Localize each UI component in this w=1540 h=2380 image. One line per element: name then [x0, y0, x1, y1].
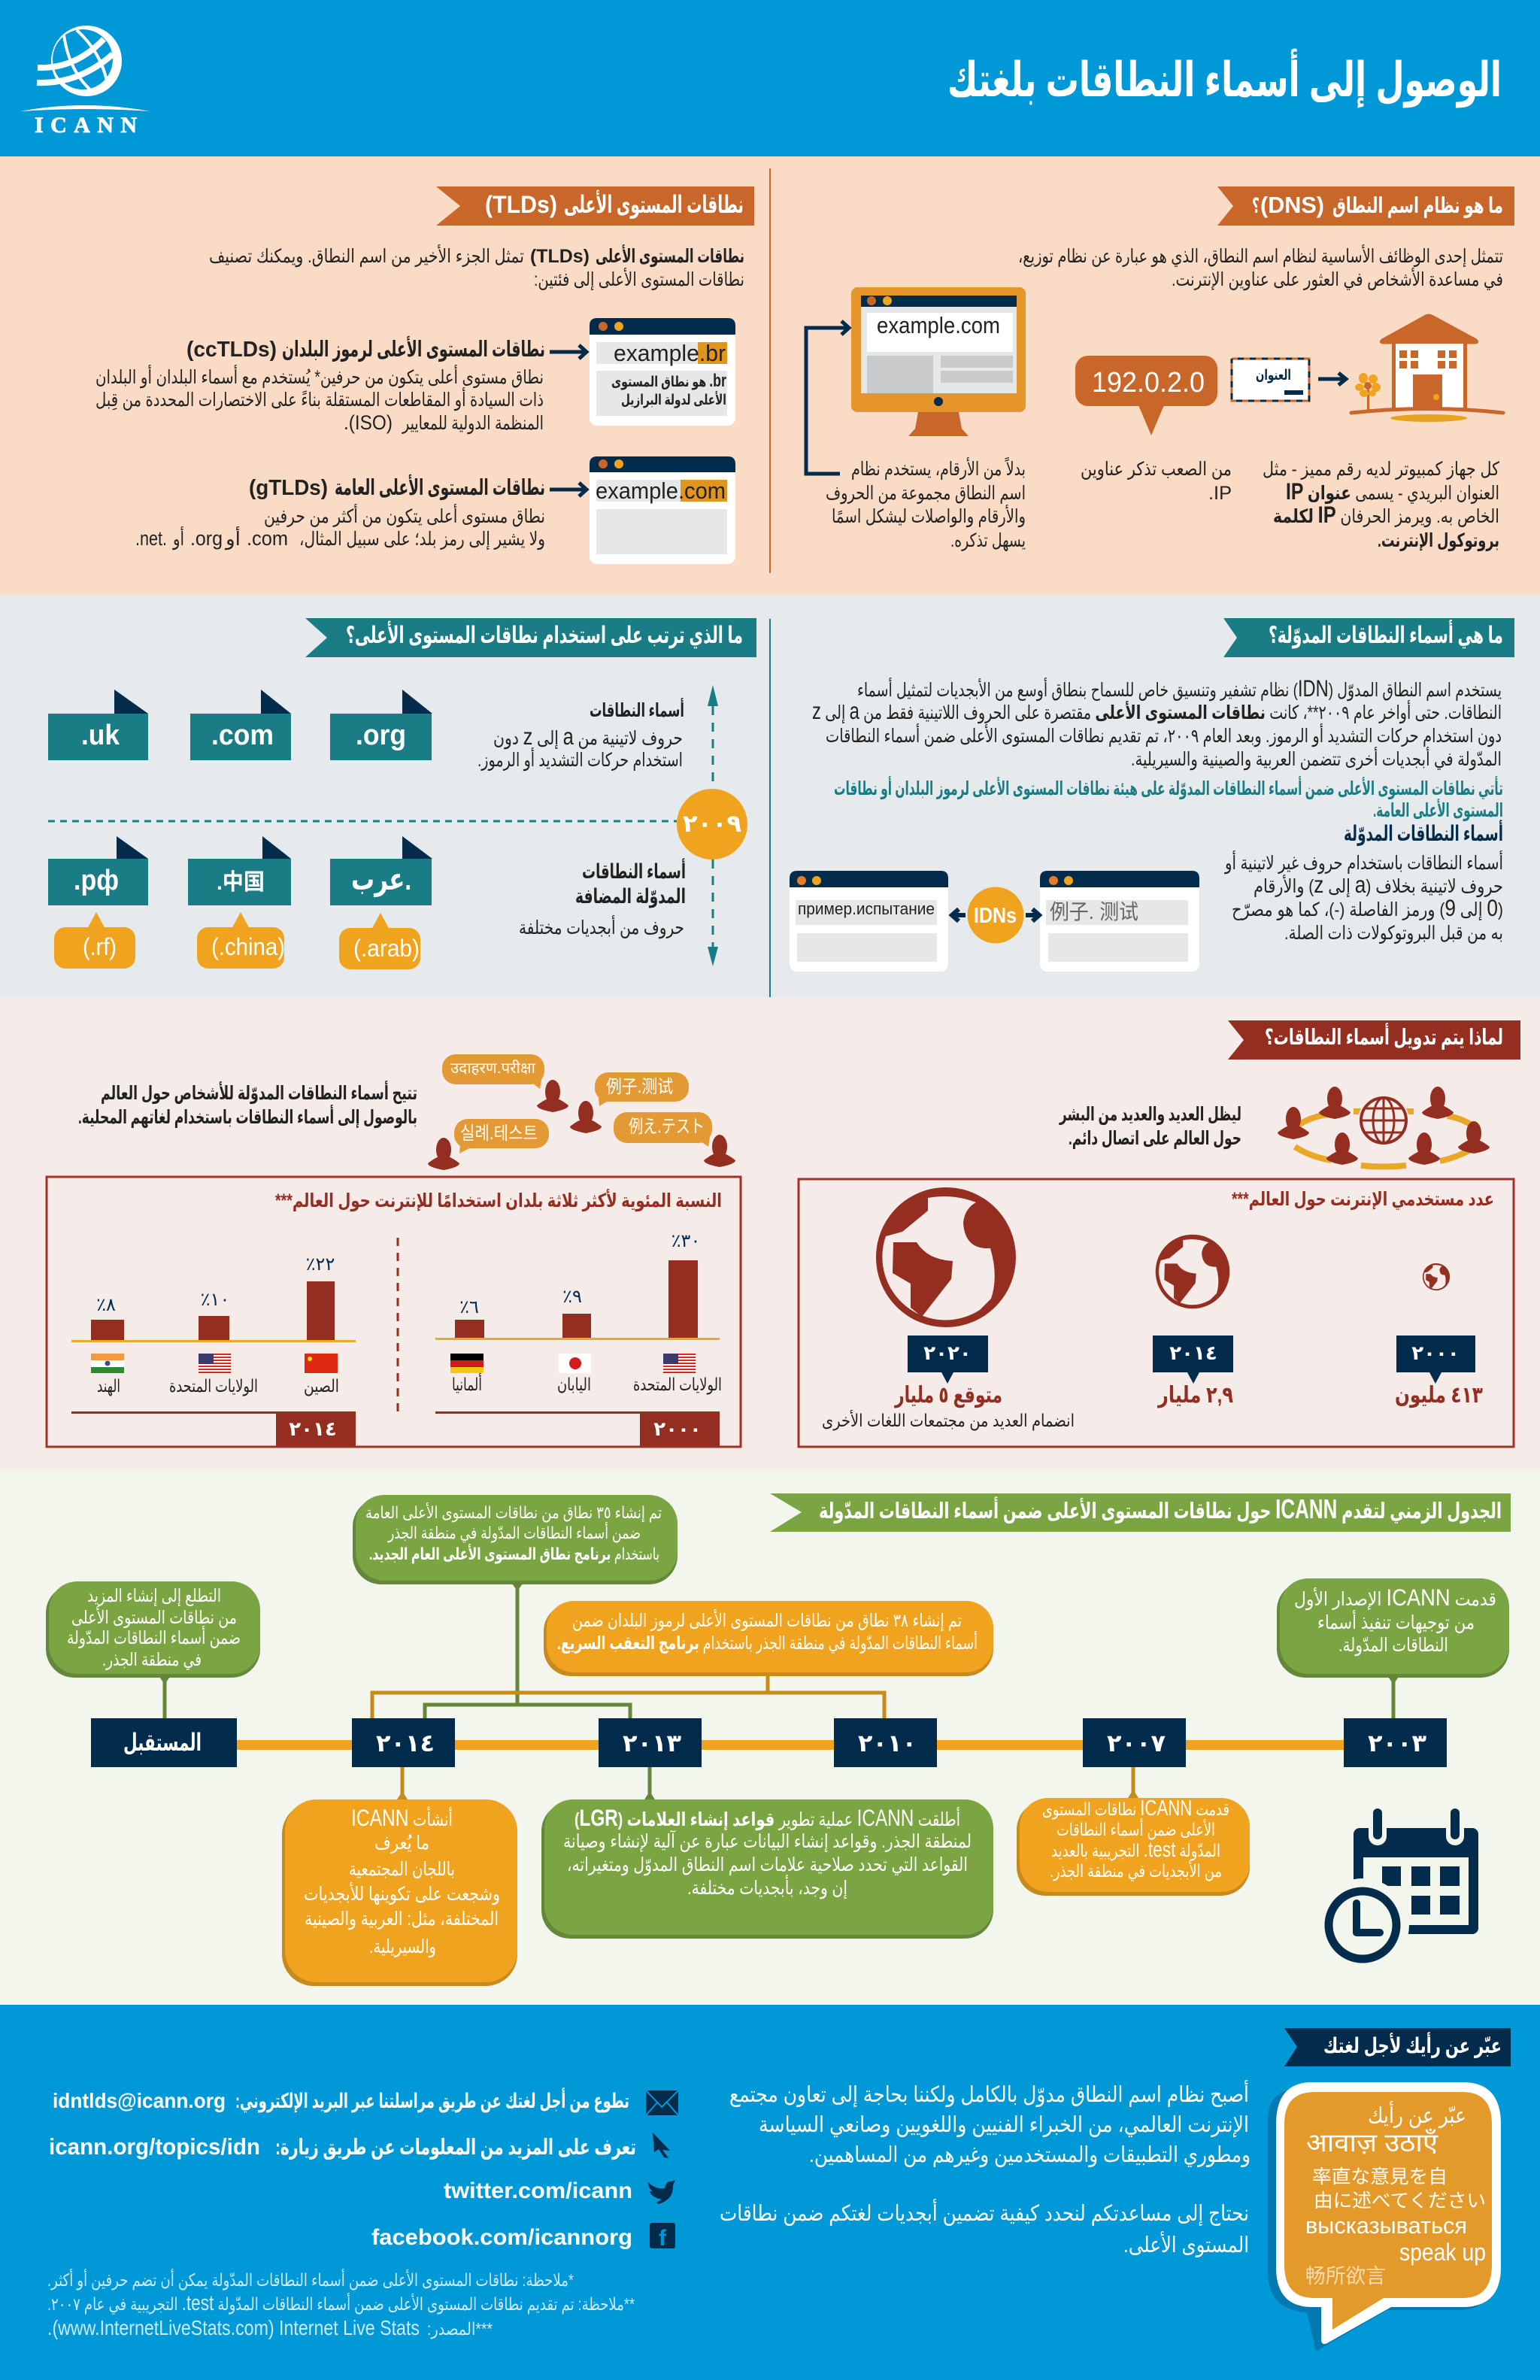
gTLDs text: أو: [224, 526, 241, 550]
globe: 2014: [1156, 1235, 1229, 1308]
ccTLDs text: المنظمة الدولية للمعايير: [401, 413, 544, 435]
text: people connected: ليظل العديد والعديد من البشر: [1059, 1104, 1241, 1126]
label: domain names: استخدام حركات التشديد أو الرموز.: [477, 747, 683, 772]
label: domain names: حروف لاتينية من a إلى z دون: [493, 723, 683, 750]
caption: IP address: العنوان البريدي - يسمى عنوان IP: [1286, 478, 1499, 505]
panel: TLDs: [95, 186, 754, 564]
contact: email: تطوع من أجل لغتك عن طريق مراسلتنا عبر البريد الإلكتروني:: [235, 2087, 629, 2113]
timeline year: 2007: [1083, 1718, 1186, 1767]
callout: .arab: (.arab): [353, 935, 420, 962]
callout: 2003: [1277, 1578, 1509, 1684]
arrow to house: [1318, 373, 1346, 385]
callout: 2014 community panels: باللجان المجتمعية: [349, 1859, 455, 1880]
icon: tag .uk: [48, 690, 148, 760]
text: people connected: حول العالم على اتصال دائم.: [1069, 1128, 1241, 1150]
callout: 2014 community panels: ما يُعرف: [374, 1833, 429, 1854]
browser card: example.br: ‎.br‏ هو نطاق المستوى: [611, 371, 726, 391]
year tag: 2000: [1396, 1336, 1475, 1384]
label: internationalized domain names: المدوّلة المضافة: [575, 885, 686, 908]
bar chart: 2000: الولايات المتحدة: [633, 1375, 722, 1395]
ccTLDs text: .(ISO): [344, 411, 393, 434]
callout: 2014 community panels: أنشأت ICANN: [351, 1805, 453, 1831]
icon: tag .uk: .uk: [81, 720, 120, 751]
bar chart: 2000: ٩٪: [562, 1287, 582, 1307]
icon: monitor: [851, 287, 1026, 436]
caption: domain names: بدلاً من الأرقام، يستخدم نظام: [851, 456, 1026, 480]
callout: .china: (.china): [211, 933, 285, 960]
callout: 2010 fast track: تم إنشاء ٣٨ نطاق من نطاقات المستوى الأعلى لرموز البلدان ضمن: [572, 1609, 962, 1632]
icon: envelope: العنوان: [1256, 368, 1291, 384]
icon: speak-up bubble: आवाज़ उठाएँ: [1306, 2128, 1438, 2157]
callout: 2010 fast track: [544, 1601, 993, 1676]
icon: tag .rf: [48, 836, 148, 905]
callout: 2014 gTLD: [353, 1495, 678, 1591]
browser card: example.com: [590, 456, 735, 564]
callout: 2007 test: من الأبجديات في منطقة الجذر.: [1050, 1860, 1222, 1881]
timeline year: 2014: ٢٠١٤: [376, 1730, 435, 1757]
heading ribbon: why: [1228, 1020, 1520, 1060]
ccTLDs text: [95, 335, 545, 435]
bar chart: 2014: الصين: [304, 1376, 339, 1396]
callout: future: من نطاقات المستوى الأعلى: [71, 1606, 237, 1628]
callout: 2013 LGR: [541, 1791, 993, 1939]
contact: email: idntlds@icann.org: [53, 2089, 226, 2112]
text: call for participation: نحتاج إلى مساعدتكم لنحدد كيفية تضمين أبجديات لغتكم ضمن نطاقات: [720, 2198, 1249, 2227]
timeline axis and connectors: [165, 1584, 1393, 1799]
icon: speech bubbles with people: 例え.テスト: [629, 1117, 705, 1137]
callout: 2014 community panels: والسيريلية.: [369, 1936, 436, 1958]
value: 2014: ٢,٩ مليار: [1157, 1383, 1233, 1408]
timeline year: future: [91, 1718, 237, 1767]
callout: 2007 test: الأعلى ضمن أسماء النطاقات: [1056, 1818, 1215, 1840]
heading ribbon: DNS: (DNS): [1260, 192, 1324, 218]
label: domain names: [477, 698, 684, 772]
timeline year: 2003: [1344, 1718, 1447, 1767]
timeline year: 2003: ٢٠٠٣: [1368, 1730, 1427, 1757]
heading ribbon: ما الذي ترتب على استخدام نطاقات المستوى الأعلى؟: [346, 620, 743, 649]
IDN description: النطاقات. حتى أواخر عام ٢٠٠٩**، كانت نطاقات المستوى الأعلى مقتصرة على الحروف اللاتينية فقط من a إلى z: [812, 698, 1502, 724]
callout: 2013 LGR: لمنطقة الجذر. وقواعد إنشاء البيانات عبارة عن آلية لإنشاء وصيانة: [563, 1830, 972, 1853]
IDN definition: [1223, 850, 1503, 944]
caption: IP address: [1263, 459, 1499, 552]
bar chart: 2000: ٣٠٪: [671, 1231, 700, 1251]
TLD intro text: نطاقات المستوى الأعلى إلى فئتين:: [534, 267, 744, 291]
gTLDs text: نطاقات المستوى الأعلى العامة: [335, 474, 545, 500]
heading ribbon: [305, 618, 756, 657]
browser card: example.br: [590, 318, 735, 426]
icon: monitor: example.com: [877, 312, 1000, 338]
contact: website: تعرف على المزيد من المعلومات عن طريق زيارة:: [275, 2136, 636, 2160]
callout: 2014 community panels: وشجعت على تكوينها للأبجديات: [304, 1881, 500, 1906]
gTLDs text: [135, 474, 545, 550]
panel: top countries chart: [47, 1177, 741, 1447]
callout: 2003: قدمت ICANN الإصدار الأول: [1294, 1584, 1496, 1611]
icon: tag .china: [188, 836, 291, 905]
bar chart: 2014: ٨٪: [96, 1295, 116, 1315]
arrow to ccTLD card: [550, 345, 587, 359]
icon: speak-up bubble: speak up: [1399, 2239, 1486, 2266]
TLD intro text: [209, 244, 744, 291]
callout: 2013 LGR: القواعد التي تحدد صلاحية علامات اسم النطاق المدوّل ومتغيراته،: [567, 1854, 968, 1876]
callout: future: التطلع إلى إنشاء المزيد: [87, 1586, 221, 1607]
gTLDs text: .com: [247, 527, 288, 550]
text: call for participation: [720, 2079, 1250, 2257]
icon: calendar and clock: [1316, 1813, 1478, 1972]
caption: IP address: الخاص به. ويرمز الحرفان IP لكلمة: [1273, 502, 1499, 528]
divider line 2009: [48, 820, 677, 823]
footnotes: [47, 2269, 635, 2339]
ICANN logo: ICANN: [35, 113, 137, 138]
gTLDs text: ولا يشير إلى رمز بلد؛ على سبيل المثال،: [299, 529, 545, 550]
icon: speak-up bubble: высказываться: [1305, 2212, 1467, 2239]
arrows and IDNs badge: IDNs: [974, 904, 1017, 928]
footnotes: .(www.InternetLiveStats.com) Internet Live Stats: [47, 2316, 420, 2339]
value: 2020: متوقع ٥ مليار: [894, 1383, 1002, 1408]
IDN description: [812, 675, 1502, 771]
text: call for participation: ومطوري التطبيقات والمستخدمين وغيرهم من المساهمين.: [809, 2143, 1250, 2168]
callout: 2007 test: قدمت ICANN نطاقات المستوى: [1042, 1796, 1229, 1821]
DNS intro text: [1018, 244, 1503, 291]
year tag: 2020: [908, 1336, 988, 1384]
callout: 2003: النطاقات المدّولة.: [1338, 1635, 1448, 1657]
heading ribbon: DNS: [1217, 186, 1514, 226]
icon: tag .rf: .рф: [74, 865, 119, 896]
gTLDs text: .org: [190, 527, 223, 550]
bar chart: 2014: ٢٠١٤: [289, 1417, 337, 1440]
footnotes: ***المصدر:: [427, 2319, 493, 2339]
chart title: النسبة المئوية لأكثر ثلاثة بلدان استخدامًا للإنترنت حول العالم***: [275, 1189, 722, 1212]
browser card: Chinese IDN: [1040, 871, 1199, 972]
heading ribbon: TLDs: (TLDs): [485, 191, 557, 218]
callout: IP address: [1075, 356, 1217, 435]
label: internationalized domain names: [519, 858, 686, 939]
icon: speak-up bubble: 由に述べてください: [1314, 2191, 1486, 2212]
timeline year: future: المستقبل: [123, 1729, 202, 1756]
label: internationalized domain names: أسماء النطاقات: [582, 858, 686, 883]
browser card: Chinese IDN: 例子. 测试: [1050, 900, 1138, 923]
bar chart: 2000: ألمانيا: [452, 1373, 482, 1394]
text: IDN access: تتيح أسماء النطاقات المدوّلة للأشخاص حول العالم: [101, 1081, 417, 1105]
timeline year: 2010: ٢٠١٠: [858, 1730, 917, 1757]
browser card: Russian IDN: [790, 871, 948, 972]
contact: twitter: twitter.com/icann: [444, 2178, 632, 2203]
icon: speech bubbles with people: [428, 1054, 735, 1170]
callout: 2007 test: المدّولة ‎.test‏ التجريبية بالعديد: [1051, 1838, 1220, 1862]
icon: tag .com: .com: [211, 720, 274, 751]
caption: hard to remember: من الصعب تذكر عناوين: [1081, 459, 1232, 481]
browser card: example.br: example.br: [614, 340, 726, 366]
icon: speak-up bubble: [1268, 2082, 1501, 2351]
icon: speech bubbles with people: 실례.테스트: [460, 1123, 538, 1144]
panel: pink section background: [0, 997, 1540, 1470]
icon: tag .arab: [330, 836, 432, 905]
text: call for participation: المستوى الأعلى.: [1123, 2230, 1249, 2257]
callout: 2007 test: [1017, 1790, 1250, 1896]
section divider: [769, 619, 771, 997]
year tag: 2014: ٢٠١٤: [1169, 1342, 1217, 1364]
heading ribbon: TLDs: نطاقات المستوى الأعلى: [564, 189, 744, 219]
label: internationalized domain names: حروف من أبجديات مختلفة: [519, 914, 684, 939]
IDN description: يستخدم اسم النطاق المدوّل (IDN) نظام تشفير وتنسيق خاص للسماح بنطاق أوسع من الأبجديات لتمثيل أسماء: [857, 675, 1502, 702]
text: IDN access: بالوصول إلى أسماء النطاقات باستخدام لغاتهم المحلية.: [78, 1105, 417, 1129]
callout: .arab: [339, 913, 420, 969]
callout: 2013 LGR: إن وجد، بأبجديات مختلفة.: [687, 1874, 847, 1899]
ccTLDs text: ذات السيادة أو المقاطعات المستقلة بناءً على الاختصارات المحددة من قِبل: [95, 387, 544, 411]
bar chart: 2014: [71, 1254, 356, 1446]
panel: grey section background: [0, 595, 1540, 997]
icon: speak-up bubble: 率直な意見を自: [1312, 2166, 1448, 2187]
callout: future: ضمن أسماء النطاقات المدّولة: [67, 1626, 241, 1648]
panel: internet users: [799, 1179, 1514, 1447]
ccTLDs text: نطاق مستوى أعلى يتكون من حرفين* يُستخدم مع أسماء البلدان أو البلدان: [95, 364, 544, 389]
icon: speech bubbles with people: 例子.测试: [606, 1077, 673, 1097]
timeline year: 2010: [834, 1718, 937, 1767]
callout: .rf: [54, 912, 135, 969]
caption: domain names: يسهل تذكره.: [950, 530, 1026, 552]
gTLDs text: أو: [171, 526, 184, 550]
panel: peach section background: [0, 156, 1540, 595]
icon: tag .org: .org: [356, 720, 406, 751]
value: 2020: انضمام العديد من مجتمعات اللغات الأخرى: [822, 1410, 1075, 1431]
caption: domain names: اسم النطاق مجموعة من الحروف: [826, 483, 1026, 505]
bar chart: 2000: اليابان: [557, 1375, 591, 1394]
icon: people around globe: [1278, 1087, 1490, 1167]
value: 2020: [822, 1383, 1075, 1431]
timeline arrow: [708, 685, 718, 966]
contact: website: icann.org/topics/idn: [49, 2133, 260, 2160]
text: call for participation: الإنترنت العالمي، من الخبراء الفنيين واللغويين وصانعي السياسة: [759, 2113, 1249, 2138]
icon: tag .com: [190, 690, 291, 760]
year tag: 2020: ٢٠٢٠: [923, 1342, 972, 1364]
callout: IP address: 192.0.2.0: [1092, 367, 1205, 399]
panel: footer background: [0, 2005, 1540, 2380]
gTLDs text: نطاق مستوى أعلى يتكون من أكثر من حرفين: [264, 503, 545, 527]
bar chart: 2014: ٢٢٪: [306, 1254, 335, 1275]
header band: [0, 0, 1540, 156]
panel: what resulted from TLDs: [48, 618, 756, 969]
TLD intro text: نطاقات المستوى الأعلى: [596, 244, 744, 268]
panel: DNS: [806, 186, 1514, 552]
callout: 2014 community panels: [282, 1791, 517, 1986]
text: call for participation: أصبح نظام اسم النطاق مدوّل بالكامل ولكننا بحاجة إلى تعاون مجتمع: [729, 2079, 1249, 2108]
heading ribbon: TLDs: [436, 186, 754, 226]
caption: domain names: [826, 456, 1026, 552]
bar chart: 2014: الهند: [97, 1376, 120, 1396]
timeline year: 2013: ٢٠١٣: [623, 1730, 682, 1757]
gTLDs text: (gTLDs): [249, 476, 328, 500]
panel: timeline section background: [0, 1470, 1540, 2005]
icon: speech bubbles with people: उदाहरण.परीक्षा: [450, 1060, 536, 1077]
callout: 2014 gTLD: تم إنشاء ٣٥ نطاق من نطاقات المستوى الأعلى العامة: [365, 1502, 662, 1523]
IDN definition: (0 إلى 9) ورمز الفاصلة (-)، كما هو مصرّح: [1232, 895, 1503, 921]
callout: 2014 community panels: المختلفة، مثل: العربية والصينية: [305, 1909, 499, 1930]
timeline year: 2014: [352, 1718, 455, 1767]
caption: IP address: كل جهاز كمبيوتر لديه رقم مميز - مثل: [1263, 459, 1499, 481]
icon: envelope: [1232, 359, 1309, 401]
callout: 2014 gTLD: باستخدام برنامج نطاق المستوى الأعلى العام الجديد.: [369, 1543, 659, 1564]
heading ribbon: DNS: ؟: [1252, 194, 1260, 217]
browser card: Russian IDN: пример.испытание: [798, 899, 935, 918]
footnotes: **ملاحظة: تم تقديم نطاقات المستوى الأعلى ضمن أسماء النطاقات المدّولة ‎.test‏ التجريبية في عام ٢٠٠٧.: [47, 2291, 635, 2315]
icon: tag .org: [330, 690, 432, 760]
contact: facebook: f: [659, 2226, 667, 2251]
bar chart: 2014: ١٠٪: [201, 1290, 229, 1310]
heading ribbon: speak up: [1284, 2028, 1511, 2066]
contact: facebook: facebook.com/icannorg: [371, 2225, 632, 2250]
callout: 2014 gTLD: ضمن أسماء النطاقات المدّولة في منطقة الجذر: [387, 1522, 641, 1543]
bar chart: 2000: [435, 1231, 722, 1446]
callout: future: في منطقة الجذر.: [102, 1650, 202, 1670]
badge: 2009: ٢٠٠٩: [683, 810, 741, 837]
browser card: example.br: الأعلى لدولة البرازيل: [621, 391, 726, 408]
value: 2000: ٤١٣ مليون: [1395, 1383, 1483, 1408]
footnotes: *ملاحظة: نطاقات المستوى الأعلى ضمن أسماء النطاقات المدّولة يمكن أن تضم حرفين أو أكثر.: [47, 2269, 574, 2291]
arrow to gTLD card: [550, 483, 587, 496]
callout: .rf: (.rf): [83, 933, 117, 960]
globe: 2000: [1423, 1263, 1450, 1290]
TLD intro text: تمثل الجزء الأخير من اسم النطاق. ويمكنك تصنيف: [209, 244, 524, 268]
ccTLDs text: (ccTLDs): [186, 338, 277, 362]
bar chart: 2000: ٢٠٠٠: [653, 1417, 702, 1440]
section divider: [769, 168, 771, 573]
caption: hard to remember: [1081, 459, 1232, 504]
highlight text: [834, 776, 1503, 822]
bar chart: 2014: الولايات المتحدة: [169, 1376, 258, 1396]
arrows and IDNs badge: [952, 887, 1039, 943]
year tag: 2014: [1153, 1336, 1233, 1384]
ccTLDs text: نطاقات المستوى الأعلى لرموز البلدان: [282, 335, 545, 362]
contact: website: [49, 2133, 670, 2160]
heading ribbon: [1223, 618, 1514, 657]
text: IDN access: [78, 1081, 417, 1129]
timeline year: 2007: ٢٠٠٧: [1107, 1730, 1166, 1757]
browser card: example.com: example.com: [596, 478, 726, 504]
label: domain names: أسماء النطاقات: [590, 698, 684, 721]
bar chart: 2000: ٦٪: [459, 1297, 479, 1317]
badge: 2009: [677, 789, 747, 860]
contact: email: [53, 2087, 678, 2115]
IDN definition: حروف لاتينية بخلاف (a إلى z) والأرقام: [1254, 872, 1503, 898]
icon: tag .arab: .عرب: [351, 863, 411, 897]
callout: .china: [197, 912, 285, 969]
ICANN logo: [20, 26, 150, 138]
icon: house: [1351, 315, 1503, 422]
icon: speak-up bubble: عبّر عن رأيك: [1368, 2100, 1466, 2128]
callout: future: [46, 1581, 260, 1684]
panel: what are IDNs: [790, 618, 1514, 972]
year tag: 2000: ٢٠٠٠: [1411, 1342, 1460, 1364]
globe: 2020: [876, 1187, 1016, 1327]
arrow: text to monitor: [806, 321, 849, 474]
caption: domain names: والأرقام والواصلات ليشكل اسمًا: [832, 504, 1026, 528]
callout: 2003: من توجيهات تنفيذ أسماء: [1317, 1609, 1475, 1634]
icon: speak-up bubble: 畅所欲言: [1305, 2260, 1386, 2289]
timeline year: 2013: [599, 1718, 702, 1767]
TLD intro text: (TLDs): [530, 246, 590, 267]
text: people connected: [1059, 1104, 1241, 1150]
gTLDs text: .net.: [135, 527, 167, 550]
icon: tag .china: .中国: [217, 870, 265, 895]
caption: hard to remember: IP.: [1208, 483, 1232, 504]
callout: 2013 LGR: أطلقت ICANN عملية تطوير قواعد إنشاء العلامات (LGR): [574, 1805, 960, 1831]
callout: 2010 fast track: أسماء النطاقات المدّولة في منطقة الجذر باستخدام برنامج التعقب السريع.: [557, 1631, 978, 1654]
